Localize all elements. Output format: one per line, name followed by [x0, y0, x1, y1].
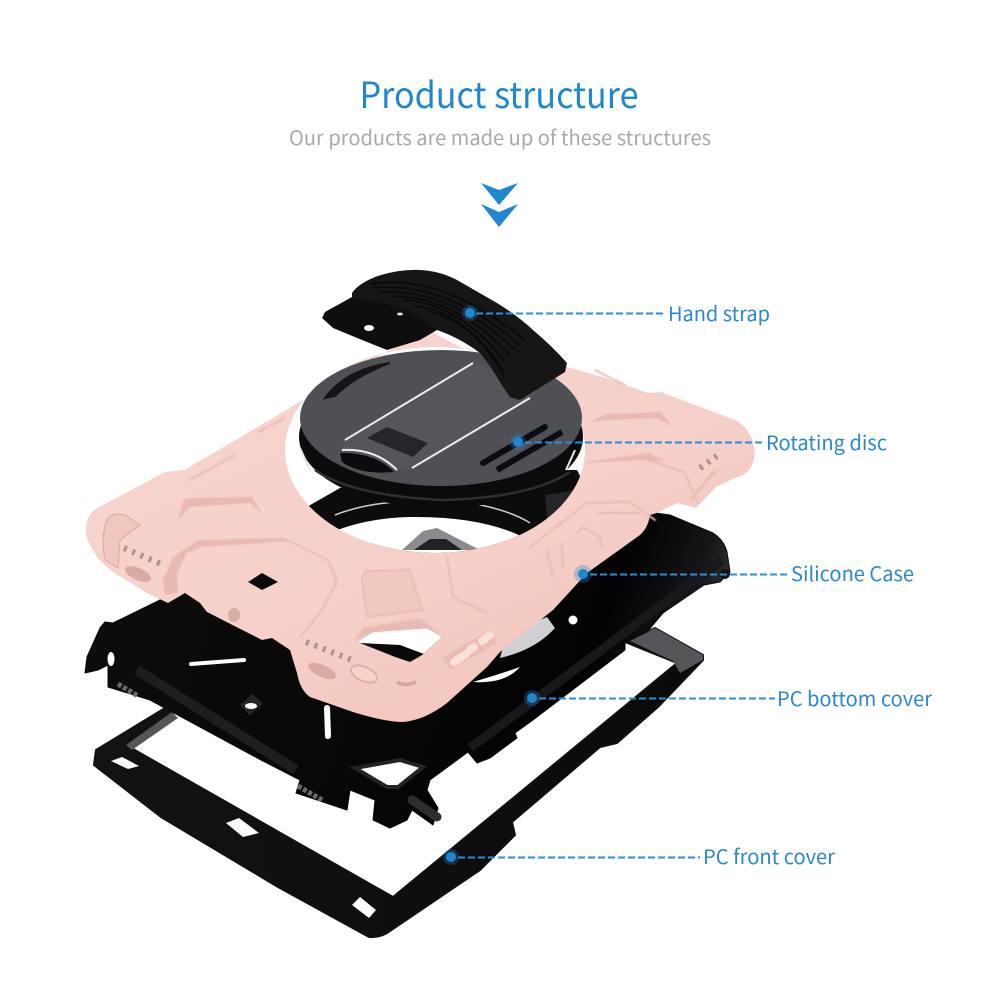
slot: bottom cover upper slot [191, 660, 244, 664]
hinge: bottom cover clips [118, 684, 322, 800]
bracket opening [414, 539, 462, 550]
gray bracket [402, 528, 480, 550]
ports: ovals and buttons [123, 563, 338, 683]
frame gray wing [630, 628, 703, 673]
callout: hand strap: Hand strap [668, 298, 770, 327]
panel: hand strap [322, 270, 567, 400]
slot: bottom cover vertical bone slot [327, 708, 328, 736]
strap main band [352, 270, 567, 400]
silver ring: visible through corner [500, 617, 555, 658]
title: Product structure [360, 67, 638, 119]
frame cutouts [111, 757, 376, 918]
hinge knob right [720, 569, 730, 579]
disc slots [325, 363, 562, 470]
white opening under silicone case [285, 347, 585, 553]
PC bottom cover [85, 500, 730, 828]
icon: double down chevron arrow [481, 183, 518, 227]
callout: rotating disc [510, 427, 887, 456]
callout: rotating disc: Rotating disc [766, 427, 887, 456]
callout: PC front cover: PC front cover [703, 841, 835, 870]
hole: bottom cover small hole [240, 694, 263, 716]
callout: PC bottom cover: PC bottom cover [777, 683, 932, 712]
button: left side [103, 514, 140, 568]
buttons: right side [454, 635, 490, 662]
panel: silicone case [86, 332, 755, 722]
PC front cover frame [94, 628, 703, 937]
stand cutout [367, 427, 428, 457]
rotating ring through opening [305, 470, 590, 550]
panel: rotating disc [299, 350, 583, 508]
hole: bottom cover corner camera cutout [355, 760, 423, 787]
hole: hinge gap [108, 652, 114, 666]
button: bottom side [348, 662, 380, 686]
strap underside flap [322, 297, 440, 350]
right edge band [470, 560, 722, 748]
callout: PC bottom cover [524, 683, 932, 712]
subtitle: Our products are made up of these structures [289, 122, 711, 151]
strap holes [364, 312, 403, 331]
pink embossed panels [163, 370, 716, 670]
small circle port [228, 608, 240, 622]
stand pin [412, 800, 437, 817]
callout: PC front cover [443, 841, 835, 870]
bottom curved port [397, 682, 416, 684]
slot: bottom cover right slit [473, 667, 520, 682]
silver ring hole [568, 616, 578, 624]
rod [137, 670, 296, 770]
callout: hand strap [462, 298, 770, 327]
white window through corner cutout [357, 628, 442, 662]
speaker grilles [124, 456, 717, 660]
strap ridges [370, 282, 525, 378]
ring right shaded piece [545, 490, 580, 528]
black wedge through corner cutout [360, 643, 424, 662]
callout: silicone case: Silicone Case [791, 558, 914, 587]
callout: silicone case [574, 558, 914, 587]
frame gray left lip [126, 712, 178, 750]
stand bar on disc [342, 363, 538, 470]
stand dark crescent [340, 453, 394, 473]
ring highlights [335, 502, 530, 523]
